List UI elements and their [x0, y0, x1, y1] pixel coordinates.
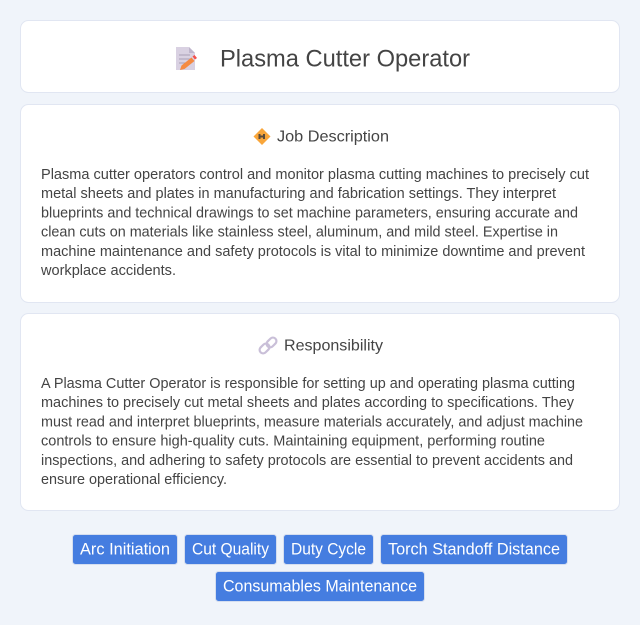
tag: Duty Cycle: Duty Cycle [291, 540, 366, 558]
tag: Arc Initiation [72, 534, 178, 564]
text block: responsibility body: controls to ensure high-quality cuts. Maintaining equipment, performing routine [41, 434, 545, 450]
text block: responsibility body: inspections, and adhering to safety protocols are essential to prevent accidents and [41, 453, 573, 469]
tag: Cut Quality: Cut Quality [192, 540, 270, 558]
tag: Arc Initiation: Arc Initiation [80, 540, 170, 558]
text block: job description body: Plasma cutter operators control and monitor plasma cutting machines to precisely cut [41, 167, 589, 183]
heading: responsibility: Responsibility [284, 338, 383, 354]
text block: job description body: blueprints and technical drawings to set machine parameters, ensuring accurate and [41, 206, 578, 222]
text block: responsibility body: A Plasma Cutter Operator is responsible for setting up and operating plasma cutting [41, 376, 575, 392]
text block: responsibility body: machines to precisely cut metal sheets and plates according to specifications. They [41, 395, 575, 411]
icon: orange diamond [254, 128, 270, 145]
text block: job description body: metal sheets and plates in manufacturing and fabrication settings. They interpret [41, 186, 556, 202]
panel: title [20, 20, 620, 92]
panel: responsibility [20, 314, 620, 510]
text block: responsibility body: ensure operational efficiency. [41, 472, 227, 488]
text block: job description body: machine maintenance and safety protocols is vital to minimize downtime and prevent [41, 244, 585, 260]
icon: chain link [258, 336, 278, 355]
icon: document with pencil [176, 47, 197, 70]
tag: Duty Cycle [284, 534, 374, 564]
panel: job description [20, 104, 620, 302]
tag: Torch Standoff Distance [380, 534, 568, 564]
text block: job description body: workplace accidents. [40, 263, 176, 279]
text block: job description body: clean cuts on materials like stainless steel, aluminum, and mild steel. Expertise in [41, 224, 558, 240]
heading: title text: Plasma Cutter Operator [220, 46, 470, 72]
tag: Torch Standoff Distance: Torch Standoff Distance [388, 540, 560, 558]
heading: job description: Job Description [277, 128, 389, 146]
text block: job description body [40, 167, 589, 279]
tag: Consumables Maintenance: Consumables Maintenance [223, 578, 417, 596]
tag: Cut Quality [184, 534, 276, 564]
text block: responsibility body: must read and interpret blueprints, measure materials accurately, and adjust machine [41, 414, 583, 430]
text block: responsibility body [41, 376, 583, 488]
tag: Consumables Maintenance [216, 572, 424, 602]
